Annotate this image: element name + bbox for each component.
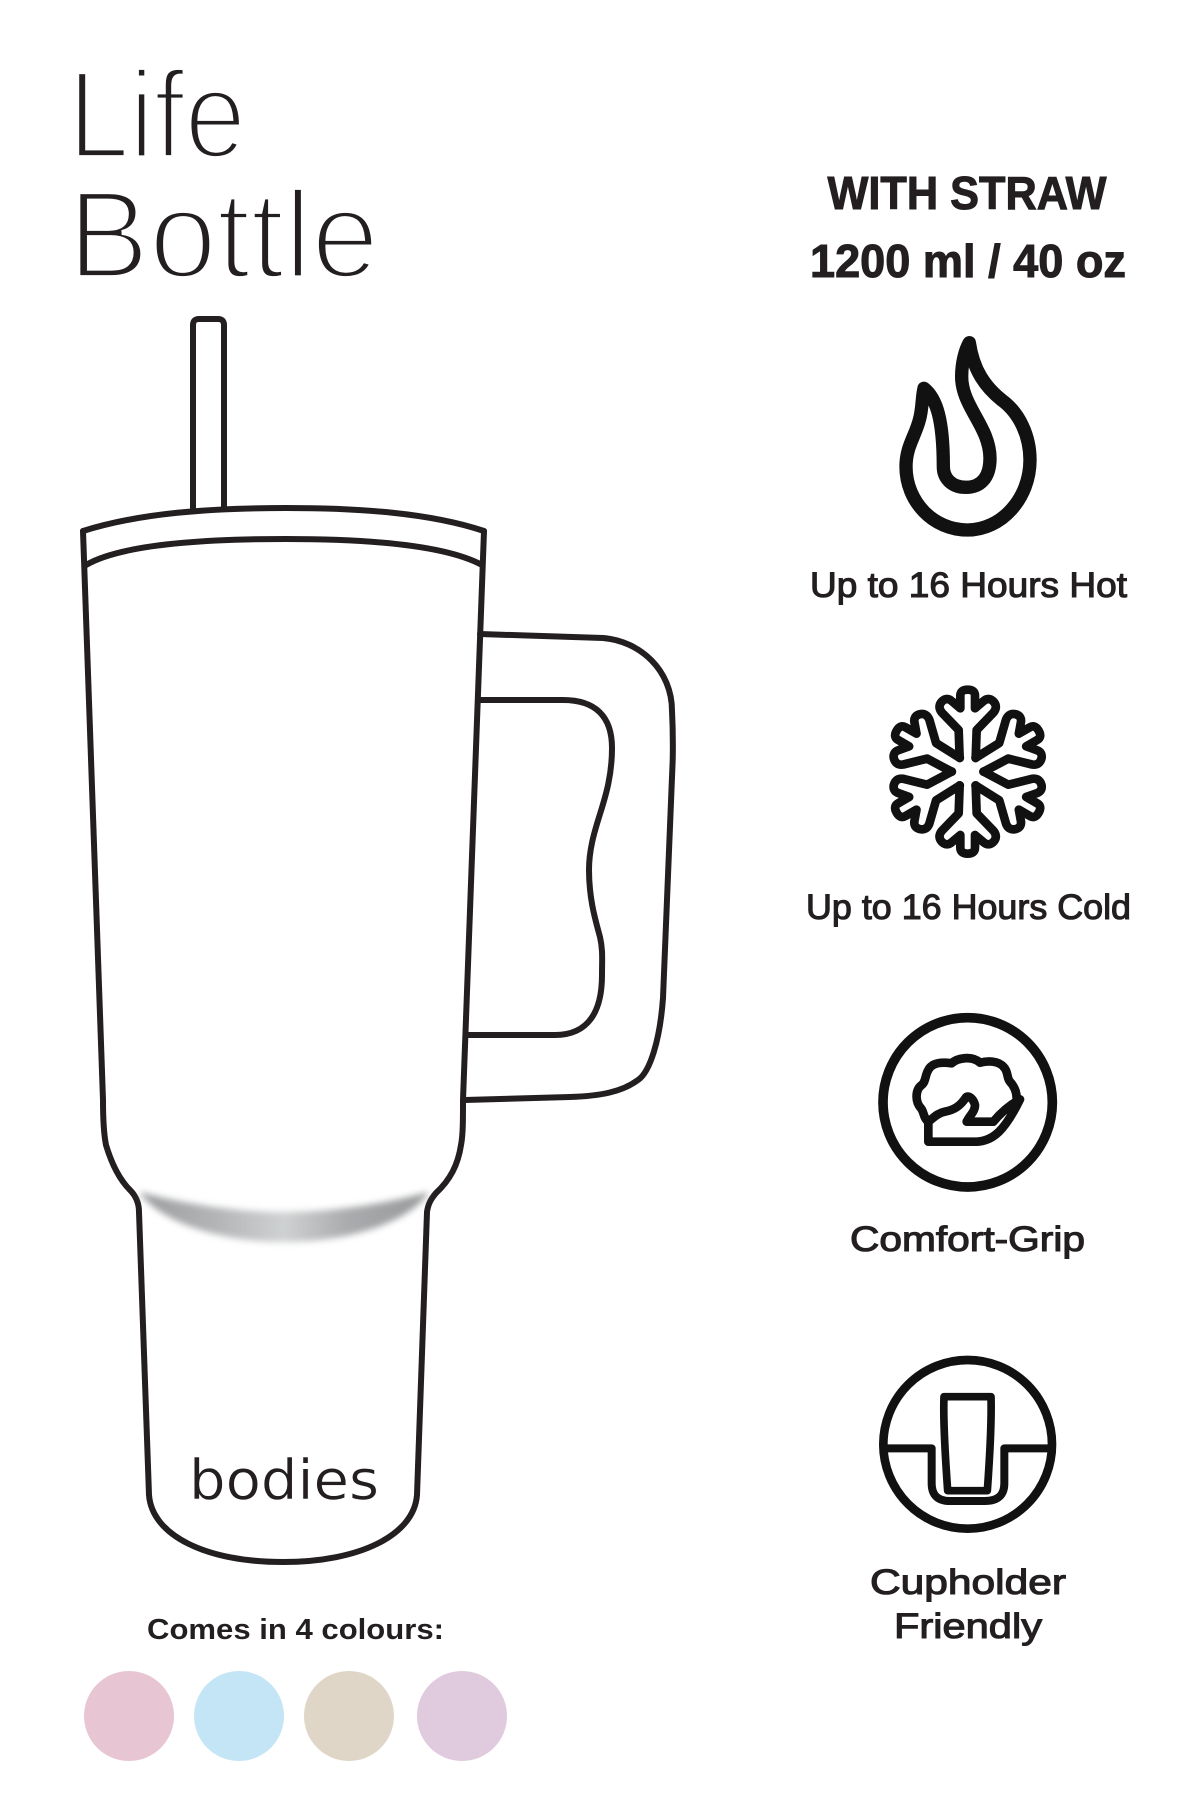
neck shadow — [139, 1192, 429, 1242]
label: hot: Up to 16 Hours Hot — [810, 566, 1127, 605]
label: cupholder friendly — [870, 1563, 1066, 1646]
capacity heading: 1200 ml / 40 oz — [810, 235, 1126, 287]
bodies logo: bodies — [189, 1448, 379, 1512]
bottle illustration — [83, 319, 673, 1562]
title: Bottle — [68, 166, 379, 304]
icon: flame — [906, 343, 1030, 530]
lid lower edge — [86, 539, 482, 565]
capacity heading: WITH STRAW — [828, 167, 1107, 219]
colour swatches — [84, 1671, 507, 1761]
lid top edge — [83, 508, 484, 531]
tumbler body — [83, 531, 484, 1562]
label: cold: Up to 16 Hours Cold — [806, 888, 1131, 927]
colours caption: Comes in 4 colours: — [147, 1614, 444, 1646]
title: Life — [68, 46, 246, 184]
icon: snowflake — [883, 690, 1053, 854]
icon: comfort grip — [883, 1018, 1052, 1187]
title — [68, 46, 379, 304]
icon: cupholder — [883, 1360, 1052, 1529]
label: cupholder friendly: Cupholder — [870, 1563, 1066, 1602]
capacity heading — [810, 167, 1126, 287]
label: cupholder friendly: Friendly — [894, 1607, 1043, 1646]
handle outer — [465, 634, 673, 1100]
label: comfort grip: Comfort-Grip — [850, 1220, 1085, 1259]
straw — [193, 319, 224, 508]
handle inner — [467, 700, 612, 1035]
